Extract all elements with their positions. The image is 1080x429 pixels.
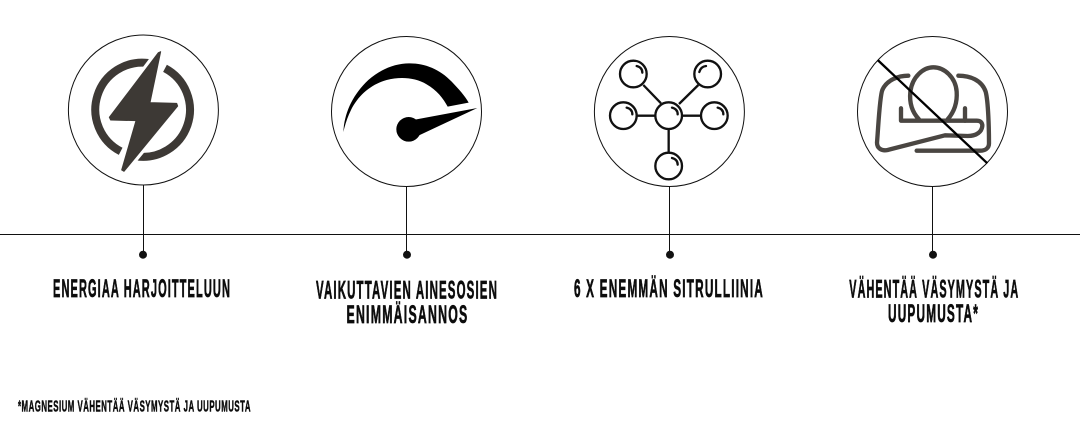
item 4: fatigue	[849, 36, 1019, 328]
connector with dot 2	[403, 186, 411, 259]
infographic: ENERGIAA HARJOITTELUUN	[53, 275, 231, 303]
icon: tired person crossed out	[877, 60, 989, 163]
infographic: VAIKUTTAVIEN AINESOSIEN	[316, 276, 498, 304]
label 2: ENIMMÄISANNOS	[346, 301, 468, 329]
item 3: citrulline	[574, 36, 764, 303]
icon: molecule	[610, 61, 728, 179]
label 4	[849, 276, 1019, 328]
item 1: energy	[53, 35, 231, 303]
icon: speedometer gauge	[343, 63, 477, 142]
connector with dot 4	[929, 186, 937, 259]
label 4: UUPUMUSTA*	[888, 300, 979, 328]
circle 4	[858, 36, 1008, 186]
circle 1	[68, 35, 218, 185]
circle 3	[594, 36, 744, 186]
infographic: *MAGNESIUM VÄHENTÄÄ VÄSYMYSTÄ JA UUPUMUSTA	[18, 398, 251, 416]
timeline axis	[0, 234, 1080, 236]
item 2: dose	[316, 36, 498, 329]
label 2	[316, 276, 498, 329]
connector with dot 3	[666, 186, 674, 259]
connector with dot 1	[139, 185, 147, 259]
infographic: 6 X ENEMMÄN SITRULLIINIA	[574, 275, 764, 303]
icon: lightning bolt in ring	[95, 52, 190, 171]
circle 2	[332, 36, 482, 186]
